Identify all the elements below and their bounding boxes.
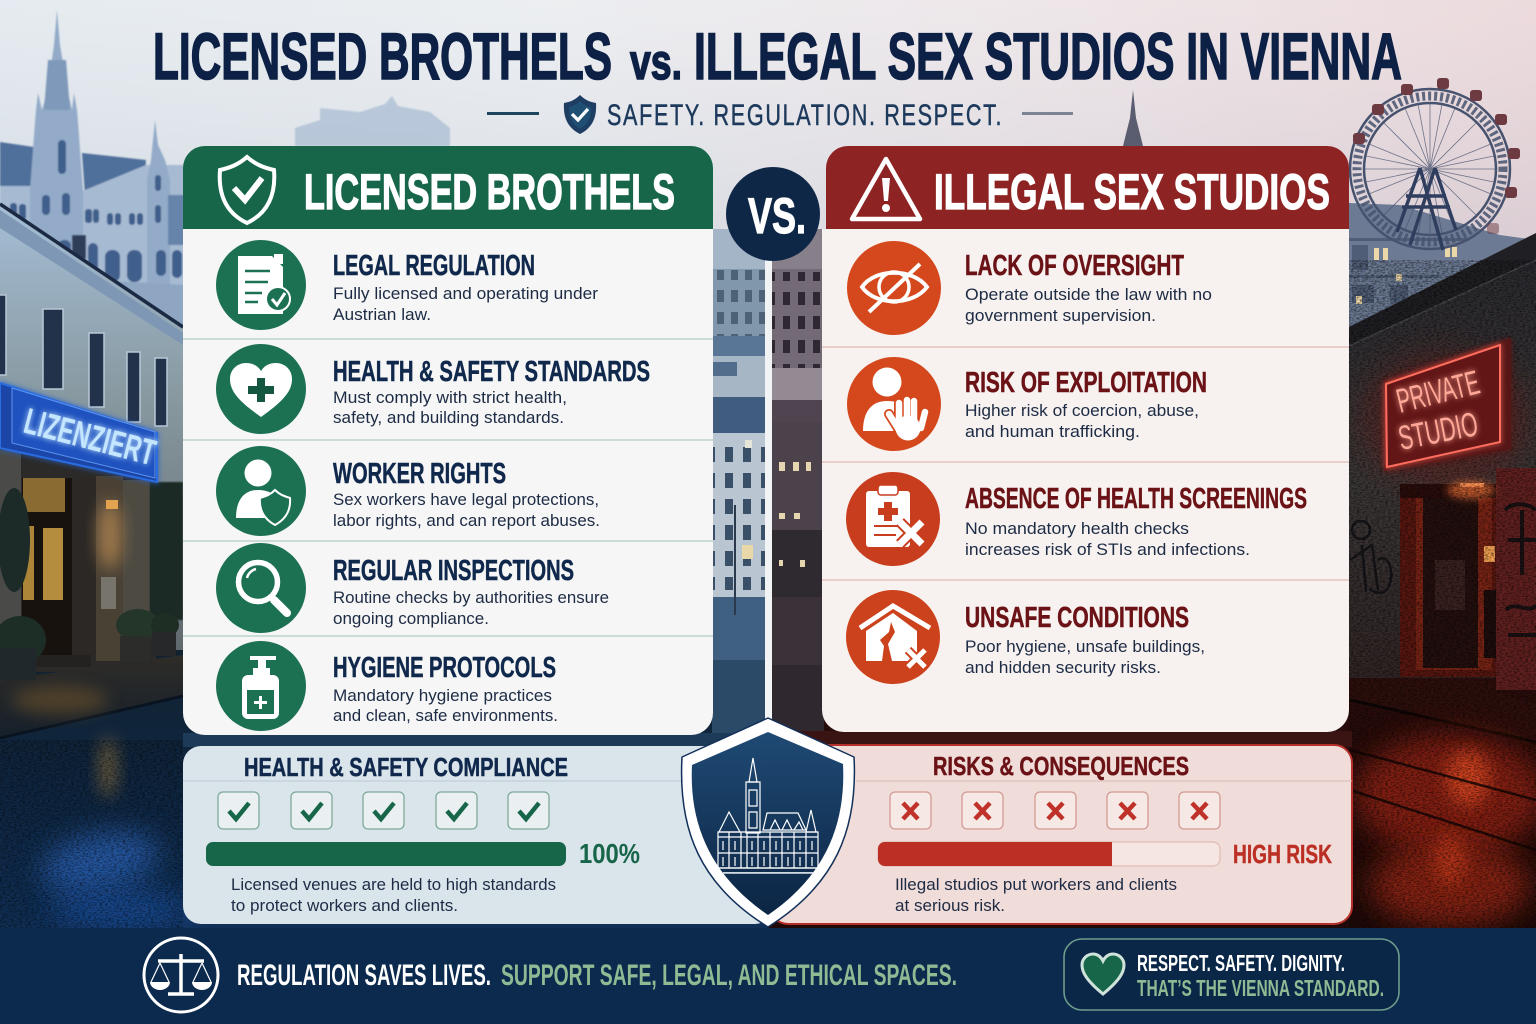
item: unsafe conditions: and hidden security risks. [965, 658, 1161, 677]
distant spire [1123, 90, 1143, 146]
grain on wet ground and wall [0, 740, 183, 930]
x mark boxes [890, 792, 1220, 829]
panel: health and safety compliance: HEALTH & SAFETY COMPLIANCE [244, 752, 568, 782]
item: absence of health screenings: ABSENCE OF HEALTH SCREENINGS [965, 483, 1307, 515]
item: regular inspections [216, 543, 609, 633]
faint distant building [295, 96, 450, 146]
central city strip, red side [772, 229, 824, 597]
item: legal regulation: Austrian law. [333, 305, 431, 324]
item: lack of oversight [847, 241, 1212, 335]
left building facade [0, 205, 183, 720]
callout: vienna standard: RESPECT. SAFETY. DIGNITY. [1137, 950, 1345, 976]
item: hygiene protocols: HYGIENE PROTOCOLS [333, 652, 556, 684]
item: legal regulation: LEGAL REGULATION [333, 250, 535, 282]
item: lack of oversight: LACK OF OVERSIGHT [965, 250, 1184, 282]
cathedral [0, 10, 184, 330]
panel: risks and consequences: at serious risk. [895, 896, 1005, 915]
item: risk of exploitation: RISK OF EXPLOITATION [965, 367, 1207, 399]
item: regular inspections: Routine checks by authorities ensure [333, 588, 609, 607]
item: legal regulation [216, 240, 598, 330]
item: risk of exploitation: and human trafficking. [965, 422, 1140, 441]
item: worker rights [216, 446, 600, 536]
item: worker rights: labor rights, and can report abuses. [333, 511, 600, 530]
item: health and safety standards [216, 344, 650, 434]
sign: private studio neon: STUDIO [1395, 405, 1481, 458]
icon: scales of justice [144, 938, 218, 1012]
vs badge: VS. [748, 188, 806, 244]
subtitle with shield: SAFETY. REGULATION. RESPECT. [607, 97, 1004, 132]
panel: risks and consequences [770, 745, 1352, 924]
item: health and safety standards: Must comply with strict health, [333, 388, 567, 407]
risk bar [878, 842, 1220, 866]
item: worker rights: WORKER RIGHTS [333, 458, 506, 490]
item: lack of oversight: government supervision. [965, 306, 1156, 325]
item: hygiene protocols: Mandatory hygiene practices [333, 686, 552, 705]
panel header: licensed brothels [183, 146, 713, 229]
item: regular inspections: REGULAR INSPECTIONS [333, 555, 574, 587]
right wall [1349, 250, 1536, 710]
panel: health and safety compliance [183, 746, 773, 924]
item: worker rights: Sex workers have legal protections, [333, 490, 599, 509]
item: absence of health screenings [846, 472, 1307, 566]
item: absence of health screenings: increases risk of STIs and infections. [965, 540, 1250, 559]
panel: health and safety compliance: 100% [579, 838, 640, 869]
item: absence of health screenings: No mandatory health checks [965, 519, 1189, 538]
Ferris wheel [1350, 89, 1510, 250]
item: hygiene protocols [216, 641, 558, 731]
right entrance [1496, 468, 1536, 705]
panel: illegal sex studios [822, 146, 1349, 732]
sign: private studio neon: PRIVATE [1393, 364, 1483, 421]
item: lack of oversight: Operate outside the law with no [965, 285, 1212, 304]
sign: private studio neon [1384, 338, 1511, 471]
main title [153, 19, 1402, 93]
subtitle with shield [487, 95, 1073, 134]
ground left [0, 650, 768, 932]
graffiti [1350, 521, 1391, 593]
item: risk of exploitation [847, 357, 1207, 451]
callout: vienna standard: THAT’S THE VIENNA STANDARD. [1137, 975, 1384, 1001]
panel: health and safety compliance: Licensed venues are held to high standards [231, 875, 556, 894]
footer banner [0, 928, 1536, 1024]
checkmark boxes [218, 792, 549, 829]
footer banner: SUPPORT SAFE, LEGAL, AND ETHICAL SPACES. [501, 959, 957, 992]
item: risk of exploitation: Higher risk of coercion, abuse, [965, 401, 1199, 420]
sign: lizenziert [0, 383, 160, 482]
compliance bar [206, 842, 566, 866]
ground right [768, 690, 1536, 932]
main title: vs. [630, 34, 682, 90]
panel: risks and consequences: Illegal studios put workers and clients [895, 875, 1177, 894]
panel header: illegal sex studios [826, 146, 1349, 229]
item: health and safety standards: HEALTH & SAFETY STANDARDS [333, 356, 650, 388]
item: regular inspections: ongoing compliance. [333, 609, 489, 628]
item: unsafe conditions: Poor hygiene, unsafe buildings, [965, 637, 1205, 656]
callout: vienna standard [1064, 939, 1399, 1010]
sign: lizenziert: LIZENZIERT [20, 400, 160, 473]
central city strip, blue side [712, 229, 766, 597]
item: unsafe conditions: UNSAFE CONDITIONS [965, 602, 1189, 634]
item: unsafe conditions [846, 590, 1205, 684]
item: hygiene protocols: and clean, safe environments. [333, 706, 558, 725]
panel header: licensed brothels: LICENSED BROTHELS [304, 164, 675, 220]
panel: risks and consequences: RISKS & CONSEQUENCES [933, 751, 1189, 781]
gaps under the panels [183, 733, 768, 747]
central shield emblem [682, 718, 854, 927]
item: legal regulation: Fully licensed and operating under [333, 284, 598, 303]
right skyline buildings [1349, 203, 1536, 345]
panel: licensed brothels [183, 146, 713, 735]
item: health and safety standards: safety, and building standards. [333, 408, 564, 427]
panel: health and safety compliance: to protect workers and clients. [231, 896, 458, 915]
panel: risks and consequences: HIGH RISK [1233, 839, 1332, 869]
center divider line [765, 250, 772, 730]
footer banner: REGULATION SAVES LIVES. [237, 959, 491, 992]
vs badge [726, 167, 820, 261]
panel header: illegal sex studios: ILLEGAL SEX STUDIOS [934, 164, 1330, 220]
entrance left [0, 448, 183, 680]
main title: LICENSED BROTHELS [153, 19, 612, 93]
